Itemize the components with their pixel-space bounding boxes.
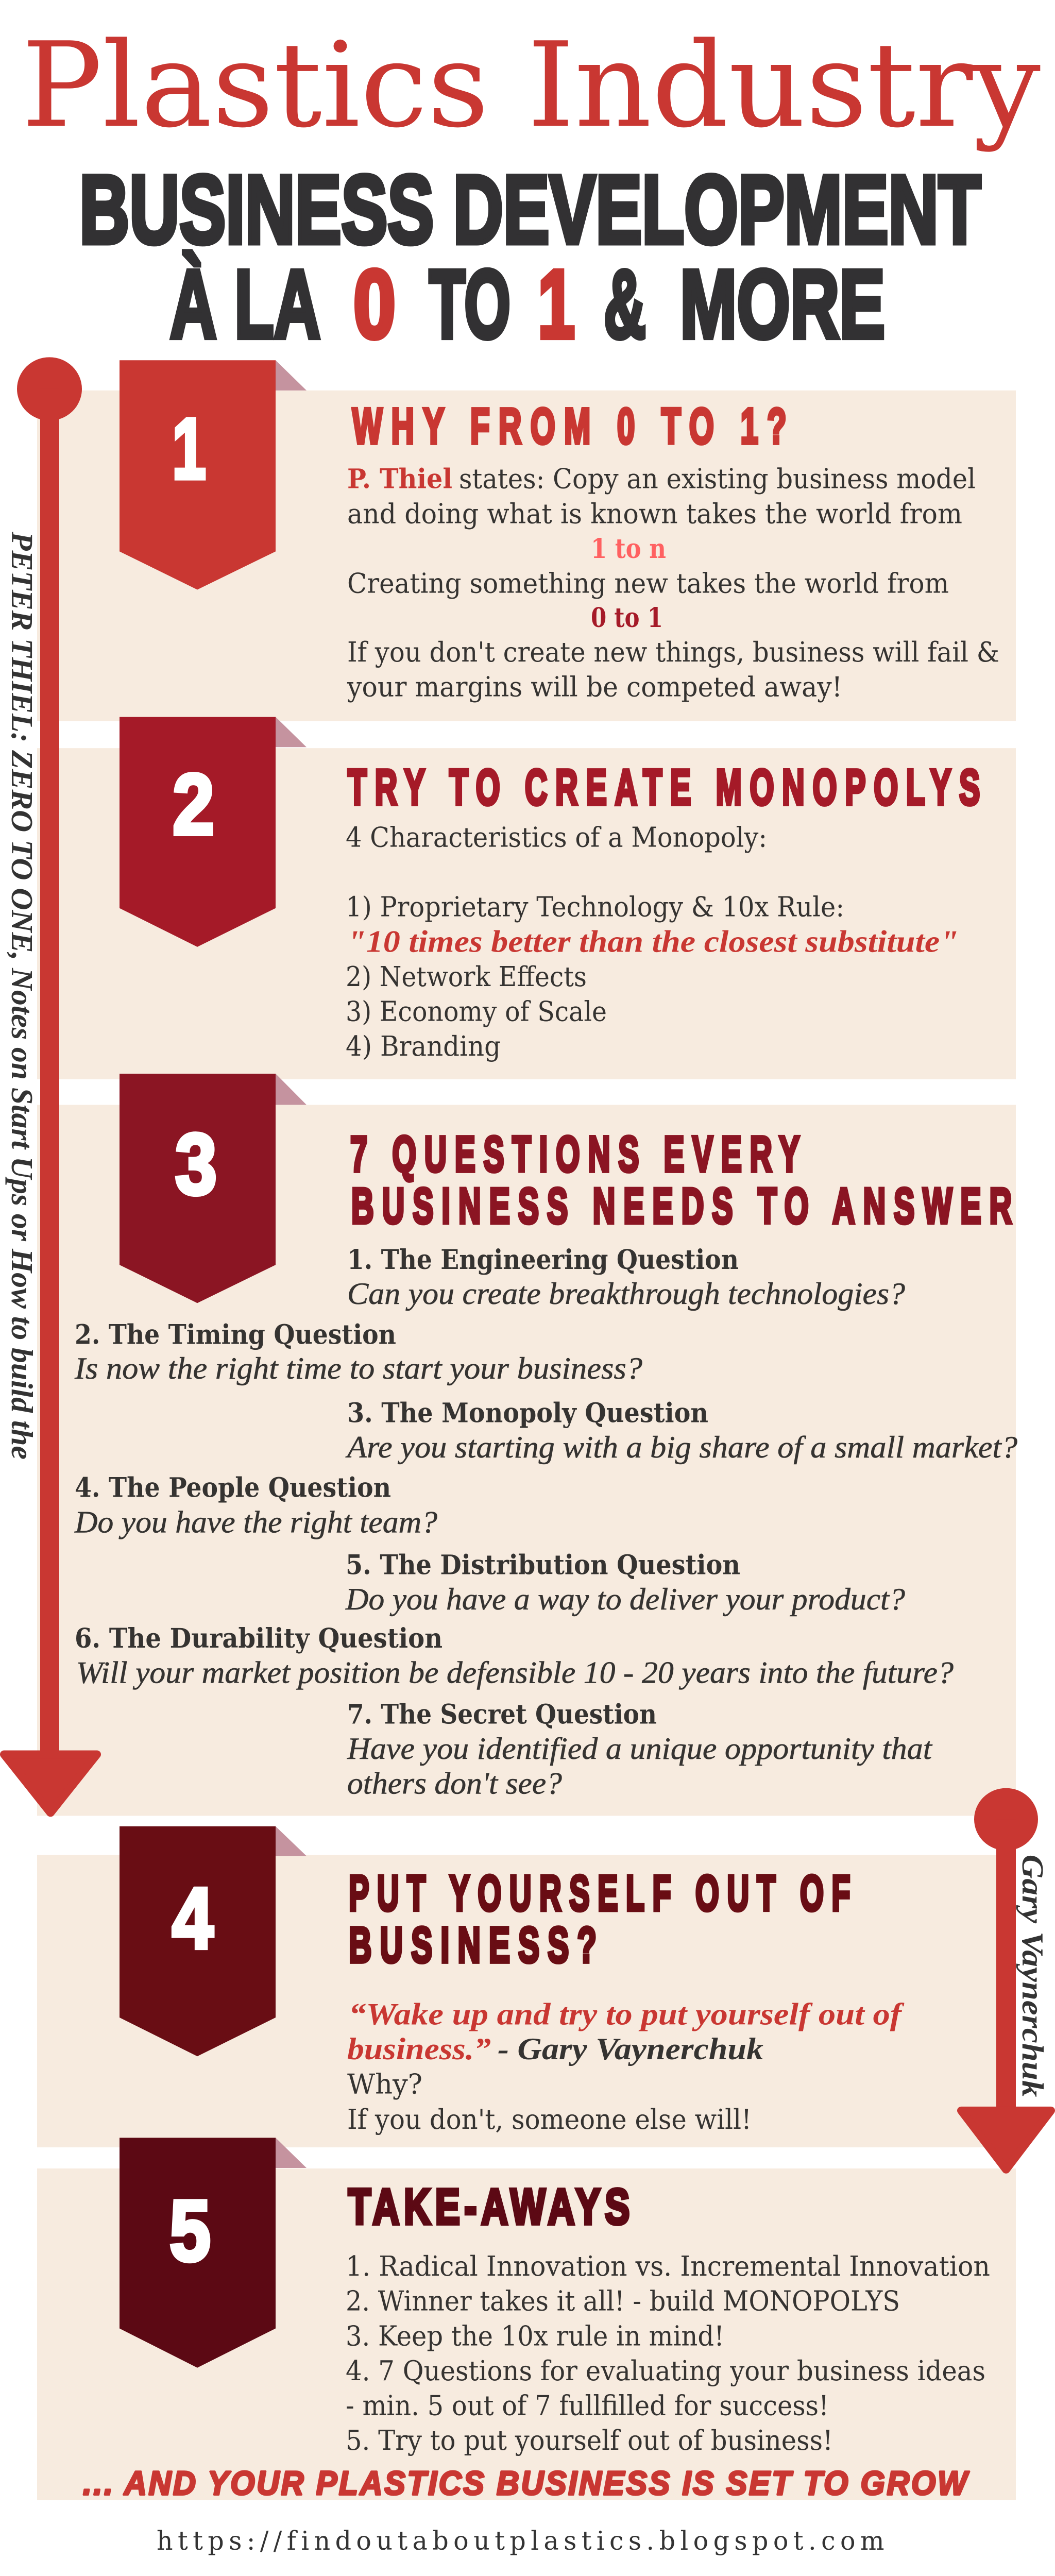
body text: your margins will be competed away!	[347, 671, 842, 703]
question 7: Have you identified a unique opportunity that	[347, 1732, 933, 1766]
title: Plastics Industry	[22, 18, 1041, 154]
question 4: Do you have the right team?	[74, 1505, 437, 1539]
question 5	[345, 1549, 905, 1617]
ribbon fold	[276, 360, 307, 391]
ribbon fold	[276, 1826, 307, 1856]
ribbon	[120, 2138, 276, 2368]
body text: and doing what is known takes the world from	[347, 498, 962, 530]
subtitle: &	[604, 250, 646, 359]
body text: P. Thiel	[347, 463, 452, 495]
question 1	[347, 1243, 905, 1311]
take-aways list: 1. Radical Innovation vs. Incremental Innovation	[346, 2250, 990, 2282]
body text: 1) Proprietary Technology & 10x Rule:	[346, 891, 844, 923]
panel background	[37, 2168, 1016, 2500]
body text: 3) Economy of Scale	[346, 995, 607, 1027]
question 3: Are you starting with a big share of a small market?	[345, 1430, 1017, 1465]
quote and body text: Why?	[347, 2068, 422, 2100]
rotated label: Gary Vaynerchuk: Gary Vaynerchuk	[1016, 1855, 1050, 2097]
question 4	[74, 1471, 437, 1539]
body text: 2) Network Effects	[346, 961, 587, 993]
number 3: 3	[175, 1116, 217, 1213]
question 6	[75, 1622, 954, 1690]
subtitle: À LA	[170, 250, 320, 359]
question 7	[347, 1698, 933, 1801]
subtitle: MORE	[680, 250, 885, 359]
take-aways list: 2. Winner takes it all! - build MONOPOLYS	[346, 2285, 900, 2317]
panel: put yourself out of business	[37, 1826, 996, 2147]
number 5: 5	[169, 2183, 211, 2279]
footer url: https://findoutaboutplastics.blogspot.com	[157, 2526, 889, 2556]
ribbon	[120, 717, 276, 947]
quote and body text: - Gary Vaynerchuk	[498, 2032, 763, 2066]
heading	[349, 1865, 858, 1973]
panel: monopolys	[37, 717, 1016, 1079]
question 6: Will your market position be defensible 10 - 20 years into the future?	[76, 1655, 954, 1690]
quote and body text	[347, 1997, 905, 2136]
question 6: 6. The Durability Question	[75, 1622, 443, 1654]
question 3	[345, 1397, 1017, 1465]
heading: BUSINESS?	[349, 1917, 605, 1973]
body text: Creating something new takes the world from	[347, 567, 949, 599]
body text: 4 Characteristics of a Monopoly:	[346, 821, 767, 853]
question 2: Is now the right time to start your business?	[74, 1351, 642, 1386]
question 5: 5. The Distribution Question	[346, 1549, 740, 1581]
question 2: 2. The Timing Question	[75, 1318, 396, 1350]
subtitle: TO	[429, 250, 511, 359]
panel: why from 0 to 1	[37, 360, 1016, 721]
number 4: 4	[172, 1870, 213, 1967]
ribbon fold	[276, 1074, 307, 1105]
subtitle	[79, 156, 981, 359]
quote and body text: “Wake up and try to put yourself out of	[349, 1997, 905, 2032]
quote and body text: If you don't, someone else will!	[347, 2103, 752, 2136]
question 4: 4. The People Question	[75, 1471, 391, 1503]
panel background	[37, 1855, 996, 2147]
ribbon	[120, 1074, 276, 1303]
ribbon	[120, 360, 276, 590]
take-aways list: 3. Keep the 10x rule in mind!	[346, 2320, 724, 2352]
panel background	[37, 391, 1016, 721]
body text: states: Copy an existing business model	[459, 463, 976, 495]
body text: 4) Branding	[346, 1030, 501, 1062]
panel background	[37, 748, 1016, 1079]
panel: take-aways	[37, 2138, 1016, 2502]
take-aways list: 4. 7 Questions for evaluating your business ideas	[346, 2355, 985, 2387]
subtitle: 1	[538, 250, 575, 359]
arrow: Gary Vaynerchuk timeline	[961, 1788, 1051, 2170]
body text: 0 to 1	[591, 601, 663, 634]
rotated label: Peter Thiel: PETER THIEL: ZERO TO ONE, Notes on Start Ups or How to build the	[5, 531, 39, 1460]
question 5: Do you have a way to deliver your product?	[345, 1582, 905, 1617]
panel: 7 questions	[37, 1074, 1020, 1816]
ribbon fold	[276, 717, 307, 747]
take-aways list: 5. Try to put yourself out of business!	[346, 2424, 833, 2456]
body text	[347, 463, 999, 703]
body text: If you don't create new things, business will fail &	[347, 636, 999, 668]
question 2	[74, 1318, 642, 1386]
question 7: 7. The Secret Question	[347, 1698, 657, 1731]
take-aways list	[346, 2250, 990, 2456]
body text: "10 times better than the closest substitute"	[347, 924, 959, 959]
panel background	[37, 1105, 1016, 1816]
number 2: 2	[173, 756, 214, 853]
quote and body text: business.”	[347, 2032, 491, 2066]
body text	[346, 821, 959, 1062]
heading	[350, 1126, 1020, 1234]
heading: WHY FROM 0 TO 1?	[352, 398, 795, 454]
take-aways list: - min. 5 out of 7 fullfilled for success!	[346, 2389, 829, 2421]
question 7: others don't see?	[347, 1766, 562, 1801]
question 1: Can you create breakthrough technologies?	[347, 1277, 905, 1311]
subtitle: 0	[353, 250, 396, 359]
question 1: 1. The Engineering Question	[347, 1243, 739, 1276]
arrow: Peter Thiel timeline	[4, 357, 97, 1813]
ribbon	[120, 1826, 276, 2056]
closing slogan: ... AND YOUR PLASTICS BUSINESS IS SET TO GROW	[83, 2465, 969, 2502]
heading: TAKE-AWAYS	[348, 2178, 634, 2234]
ribbon fold	[276, 2138, 307, 2168]
question 3: 3. The Monopoly Question	[347, 1397, 708, 1429]
body text: 1 to n	[591, 533, 666, 565]
number 1: 1	[172, 401, 206, 497]
